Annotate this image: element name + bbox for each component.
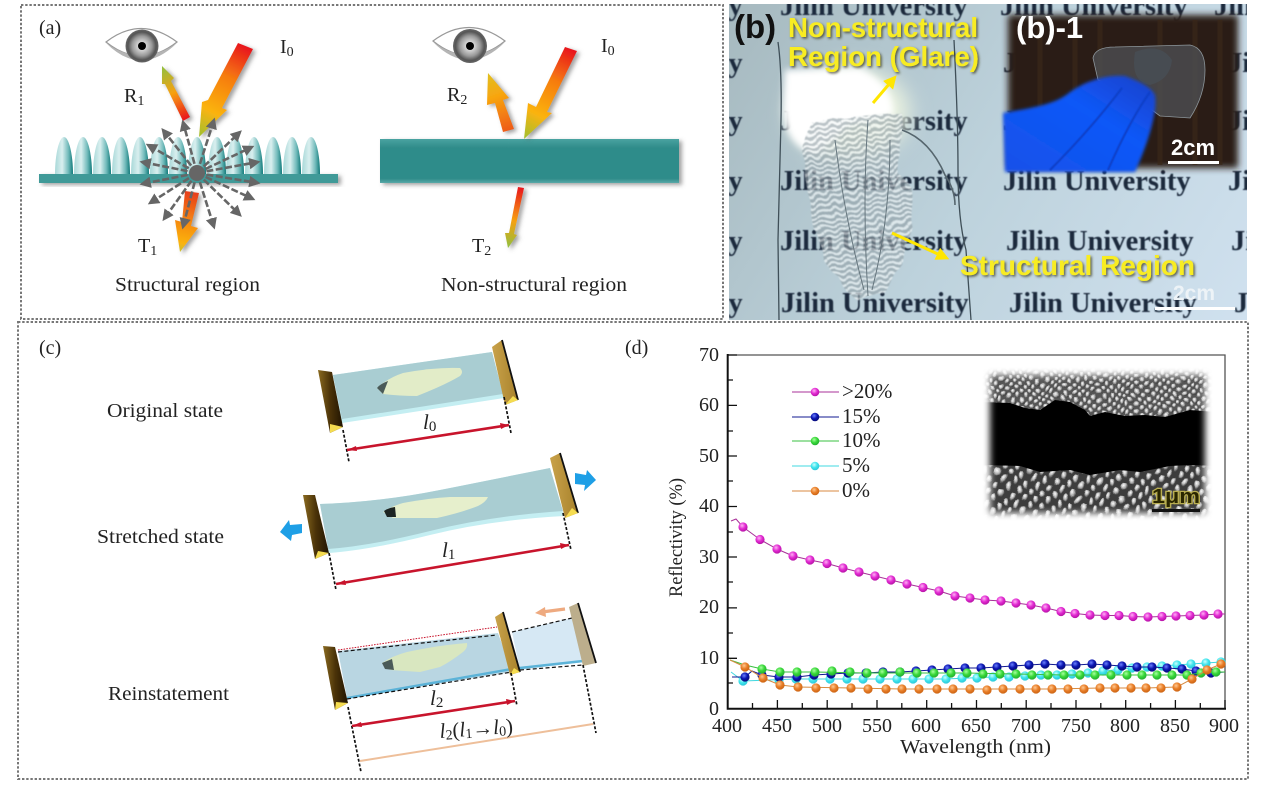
y tick labels: 0 [709, 698, 719, 720]
printed paper text: Jilin University [1009, 288, 1197, 319]
device: reinstatement: ) [505, 714, 514, 738]
device: original state: 0 [429, 419, 436, 435]
printed paper text: Jilin University [555, 48, 743, 79]
device: stretched state: l [442, 538, 448, 562]
caption: non-structural region: Non-structural region [441, 274, 627, 296]
glare spot [783, 67, 910, 157]
label c: (c) [39, 337, 61, 359]
axis title: wavelength: Wavelength (nm) [900, 736, 1051, 758]
printed paper text: Jilin University [780, 226, 968, 257]
label b: (b) [734, 8, 776, 45]
label T2: T [472, 235, 484, 257]
device: reinstatement: l [439, 719, 446, 743]
printed paper text [729, 4, 1247, 319]
inset b-1 photo [1003, 15, 1238, 172]
caption: structural region: Structural region [115, 274, 260, 296]
legend [792, 379, 892, 502]
label T1: 1 [150, 244, 157, 259]
device: reinstatement: → [471, 715, 494, 741]
device: reinstatement: 2 [445, 728, 453, 744]
scale bar: photo: 2cm [1173, 282, 1215, 305]
y tick labels: 40 [699, 495, 719, 517]
label b-1: (b)-1 [1016, 10, 1083, 45]
icon: eye [433, 28, 505, 63]
panel c: stretching schematic [39, 337, 596, 772]
device: reinstatement: ( [451, 718, 460, 742]
label R2: R [447, 84, 460, 106]
legend: 10% [842, 428, 880, 452]
device: reinstatement: 0 [499, 724, 507, 740]
x tick labels: 800 [1110, 715, 1140, 737]
device: reinstatement: l [492, 715, 500, 739]
printed paper text: Jilin University [780, 106, 968, 137]
label I0: 0 [608, 44, 615, 59]
printed paper text: Jilin University [555, 166, 743, 197]
device: reinstatement [323, 603, 596, 772]
arrow: R2 reflected [487, 73, 514, 132]
label R1: 1 [137, 94, 144, 109]
x tick labels: 900 [1209, 715, 1239, 737]
device: reinstatement: l [430, 686, 436, 710]
device: reinstatement: l [458, 717, 466, 742]
label non-structural region [788, 12, 979, 72]
panel a: structural region [39, 17, 338, 296]
printed paper text: Jilin University [1003, 106, 1191, 137]
legend: 0% [842, 478, 870, 502]
series: 15% [732, 659, 1225, 682]
label I0: 0 [287, 45, 294, 60]
panel a: non-structural region [380, 28, 679, 296]
y tick labels: 50 [699, 445, 719, 467]
scale bar: inset [1168, 140, 1219, 164]
label non-structural region: Region (Glare) [788, 41, 979, 72]
arrow: to glare [873, 83, 890, 103]
label R1: R [124, 85, 137, 107]
panel frame: a [21, 5, 723, 319]
device: original state [318, 340, 518, 462]
device: reinstatement: 2 [436, 695, 443, 711]
panel d: reflectivity chart [625, 337, 1239, 758]
nanostructure substrate [39, 137, 338, 183]
x tick labels: 850 [1160, 715, 1190, 737]
panel frame: c and d [18, 322, 1248, 779]
scatter arrows [142, 120, 258, 227]
printed paper text: Jilin University [781, 288, 969, 319]
label I0: I [601, 35, 608, 57]
device: reinstatement: 1 [465, 727, 473, 742]
photo background [729, 4, 1247, 320]
y tick labels: 60 [699, 394, 719, 416]
x tick labels: 450 [762, 715, 792, 737]
series: 0% [730, 659, 1226, 695]
y tick labels [699, 344, 719, 720]
arrow: I0 incident [524, 47, 577, 139]
label non-structural region: Non-structural [788, 12, 978, 43]
label structural region: Structural Region [960, 250, 1195, 281]
legend: 15% [842, 404, 880, 428]
device: stretched state [280, 453, 596, 590]
x tick labels: 750 [1061, 715, 1091, 737]
axes [728, 354, 1226, 709]
y tick labels: 70 [699, 344, 719, 366]
panel b: photograph [729, 4, 1247, 320]
printed paper text: Jilin University [555, 288, 743, 319]
label R2: 2 [460, 93, 467, 108]
caption: reinstatement: Reinstatement [108, 683, 229, 705]
scatter centre [189, 165, 205, 181]
label d: (d) [625, 337, 648, 359]
axis title: reflectivity: Reflectivity (%) [667, 478, 687, 597]
x tick labels [712, 715, 1239, 737]
printed paper text: Jilin University [1006, 226, 1194, 257]
film edges [778, 40, 971, 320]
arrow: T1 transmitted [175, 191, 199, 252]
label T1: T [138, 235, 150, 257]
y tick labels: 10 [699, 647, 719, 669]
scale bar: SEM: 1μm [1152, 486, 1200, 508]
leaf-shaped structural film [802, 112, 955, 300]
arrow: to structural region [892, 233, 940, 255]
x tick labels: 500 [812, 715, 842, 737]
device: stretched state: 1 [448, 547, 455, 563]
caption: original state: Original state [107, 400, 223, 422]
x tick labels: 600 [911, 715, 941, 737]
series: over 20% [731, 519, 1225, 622]
inset: SEM image [984, 370, 1211, 518]
flat film bar [380, 139, 679, 183]
x tick labels: 550 [862, 715, 892, 737]
series: 10% [730, 660, 1225, 680]
printed paper text: Jilin University [1003, 48, 1191, 79]
y tick labels: 20 [699, 596, 719, 618]
caption: stretched state: Stretched state [97, 526, 224, 548]
icon: eye [106, 28, 177, 62]
scale bar: inset: 2cm [1171, 135, 1215, 160]
x tick labels: 700 [1011, 715, 1041, 737]
scale bar: photo [1155, 286, 1235, 310]
printed paper text: Jilin University [555, 106, 743, 137]
arrow: I0 incident [199, 43, 253, 137]
legend: >20% [842, 379, 892, 403]
arrow: R1 reflected [162, 66, 190, 121]
printed paper text: Jilin University [555, 226, 743, 257]
device: original state: l [423, 410, 429, 434]
legend: 5% [842, 453, 870, 477]
label T2: 2 [484, 244, 491, 259]
label I0: I [280, 36, 287, 58]
x tick labels: 650 [961, 715, 991, 737]
arrow: T2 transmitted [505, 187, 524, 248]
y tick labels: 30 [699, 546, 719, 568]
printed paper text: Jilin University [780, 166, 968, 197]
series: 5% [731, 657, 1226, 686]
printed paper text: Jilin University [1003, 166, 1191, 197]
x tick labels: 400 [712, 715, 742, 737]
label a: (a) [39, 17, 61, 39]
